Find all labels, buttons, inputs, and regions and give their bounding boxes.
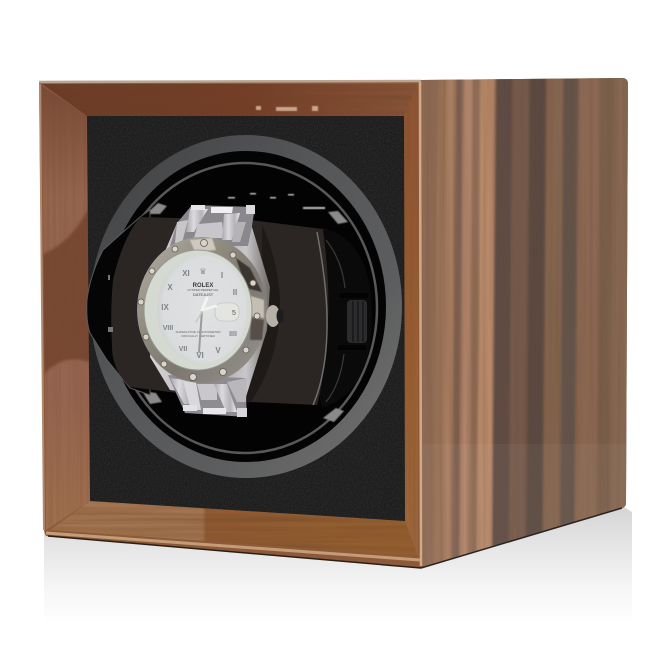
frame bottom bevel	[48, 500, 420, 558]
ribbed knob	[347, 300, 367, 343]
dial logo: SUPERLATIVE CHRONOMETER	[175, 330, 221, 334]
cradle: lip studs	[108, 275, 113, 332]
dial	[157, 255, 247, 363]
bracelet top	[170, 205, 255, 246]
cradle: rear reflections	[228, 193, 325, 209]
frame top highlights	[256, 106, 318, 111]
dial logo: DATEJUST	[193, 292, 214, 297]
dial numerals: V	[215, 346, 221, 355]
frame left bevel	[40, 86, 92, 532]
box: front frame	[39, 80, 622, 568]
case shadow	[240, 225, 280, 403]
dial hands	[196, 298, 216, 352]
frame right bevel	[404, 92, 418, 555]
dial ring	[144, 250, 252, 370]
dial numerals: VIII	[163, 325, 173, 332]
dial numerals: VI	[196, 351, 204, 360]
floor reflection shadow	[44, 506, 632, 625]
crown	[266, 305, 284, 327]
dial logo	[175, 267, 221, 338]
case and lugs	[150, 223, 270, 400]
bracelet bottom	[168, 375, 247, 417]
winder: outer grey ring	[98, 143, 394, 470]
dial logo: OYSTER PERPETUAL	[187, 288, 219, 292]
dial date window: 5	[232, 310, 236, 317]
dial logo: ROLEX	[193, 283, 213, 289]
product photo: watch winder box	[39, 78, 632, 592]
cradle: right black section	[300, 228, 372, 408]
bezel diamonds	[138, 240, 260, 380]
dial logo: ♛	[199, 267, 207, 276]
dial numerals: IX	[161, 303, 169, 312]
dial numerals	[161, 269, 237, 360]
bezel highlights	[190, 238, 264, 340]
thin curves	[326, 240, 345, 402]
dial logo: OFFICIALLY CERTIFIED	[181, 334, 216, 338]
frame edges	[39, 81, 421, 82]
cradle: grey corner clips	[142, 203, 348, 422]
dial numerals: IIII	[229, 331, 237, 338]
dial numerals: XI	[182, 269, 190, 278]
cradle: left black lip	[87, 210, 150, 395]
dial numerals: VII	[179, 346, 187, 353]
cradle: pillow edge highlight	[313, 232, 327, 405]
dial numerals: II	[233, 288, 237, 297]
black felt back panel	[85, 114, 407, 524]
cradle: pillow	[111, 217, 328, 405]
frame top bevel	[42, 84, 418, 116]
frame outer shape	[39, 80, 422, 568]
dial date window	[215, 303, 239, 321]
bezel	[137, 237, 267, 383]
dial numerals: I	[221, 271, 223, 280]
dial numerals: X	[167, 283, 173, 292]
watch	[137, 205, 284, 417]
winder: inner thin ring	[113, 163, 377, 453]
box: right side wood face	[418, 76, 633, 572]
